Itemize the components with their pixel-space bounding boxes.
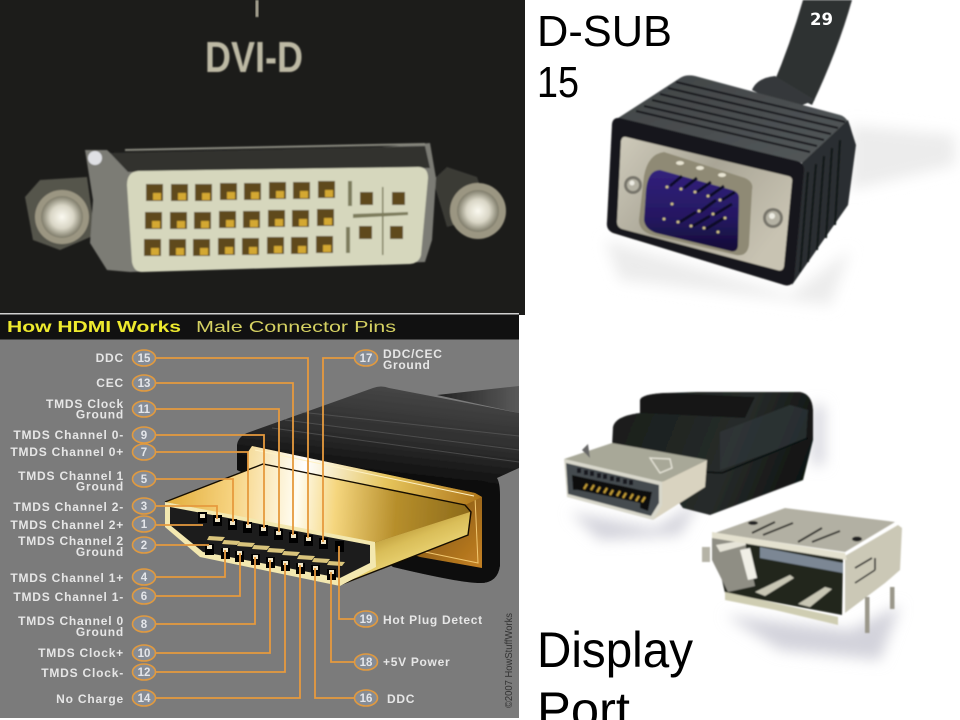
label: Display Port [537, 622, 693, 720]
gold side surface [340, 512, 470, 585]
icon: D-SUB 15 VGA connector photo [605, 0, 955, 305]
label: D-SUB 15: 15 [537, 58, 579, 107]
pin numbers: 10 [138, 648, 150, 660]
contact slot [572, 475, 652, 511]
cable [773, 0, 852, 105]
pin numbers: 6 [141, 591, 147, 603]
pin numbers: 2 [141, 540, 147, 552]
pin numbers: 13 [138, 378, 150, 390]
left pin labels: TMDS Channel 2- [13, 500, 124, 514]
panel: DVI-D connector photo [0, 0, 525, 315]
pin numbers: 8 [141, 619, 148, 631]
pin numbers: 14 [138, 693, 151, 705]
soft shadows [570, 405, 900, 660]
pin numbers: 18 [360, 657, 373, 669]
pin leader lines [156, 358, 354, 698]
cream top strip [248, 446, 482, 505]
label: Display Port: Display [537, 622, 693, 678]
left wall [712, 537, 755, 592]
header bar: Male Connector Pins [196, 319, 396, 336]
shell highlights [676, 161, 726, 177]
left pin labels: TMDS Channel 1+ [10, 571, 124, 585]
left pin labels: Ground [76, 625, 124, 639]
left pin labels: TMDS Clock [46, 397, 124, 411]
housing front [607, 118, 804, 285]
right pin labels: Ground [383, 358, 431, 372]
left pin labels: TMDS Channel 0- [13, 428, 124, 442]
gold pin highlights [151, 190, 333, 255]
pin numbers: 3 [141, 501, 147, 513]
housing ridges [272, 412, 519, 462]
orange rear rim [248, 446, 482, 568]
left pin labels: Ground [76, 480, 124, 494]
pin numbers [138, 353, 373, 705]
black plug face [170, 507, 370, 578]
pin numbers: 11 [138, 404, 151, 416]
metal side [653, 460, 707, 520]
blue insert [644, 170, 739, 251]
metal plate [617, 137, 792, 270]
latch [640, 393, 755, 418]
right pin labels: Hot Plug Detect [383, 613, 483, 627]
left pin labels: TMDS Channel 1- [13, 590, 124, 604]
bottom rail [725, 592, 838, 625]
pin numbers: 17 [360, 353, 372, 365]
pin numbers: 4 [141, 572, 148, 584]
left pin labels: TMDS Channel 2+ [10, 518, 124, 532]
right pin labels: DDC [387, 692, 415, 706]
housing side [792, 120, 856, 285]
pin numbers: 16 [360, 693, 372, 705]
label: D-SUB 15 [537, 7, 672, 107]
D shell [639, 152, 752, 255]
tongues [755, 575, 794, 596]
left pin labels: Ground [76, 408, 124, 422]
plug body [612, 392, 813, 515]
metal top [564, 443, 707, 482]
top plate holes [748, 521, 758, 525]
upper pin blocks [198, 512, 344, 552]
header bar [0, 313, 519, 340]
left pin labels: No Charge [56, 692, 124, 706]
pin number badges [132, 350, 378, 706]
pin numbers: 1 [141, 519, 148, 531]
side plate [845, 525, 902, 613]
shoulder highlight [720, 405, 808, 470]
flat blade slot and cross [346, 181, 408, 255]
right pin labels: DDC/CEC [383, 347, 443, 361]
left pin labels: TMDS Clock+ [38, 646, 124, 660]
screws [624, 176, 642, 194]
pin numbers: 12 [138, 667, 150, 679]
tick mark above label [256, 0, 258, 17]
top plate [715, 508, 895, 552]
gold top plate [165, 464, 470, 543]
DisplayPort socket [702, 508, 902, 633]
right pin labels [383, 347, 483, 706]
metal shell [85, 143, 436, 272]
left pin labels: TMDS Channel 0+ [10, 445, 124, 459]
label: DVI-D: DVI-D [205, 33, 303, 82]
top rail [712, 532, 847, 560]
left pin labels: CEC [96, 376, 124, 390]
cable [437, 386, 519, 413]
lower pin blocks [205, 544, 336, 580]
pin numbers: 9 [141, 430, 147, 442]
pin strip [760, 547, 843, 573]
pin numbers: 5 [141, 474, 148, 486]
left pin labels: TMDS Channel 2 [18, 534, 124, 548]
left screw [25, 177, 95, 250]
pin numbers: 19 [360, 614, 372, 626]
right pin labels: +5V Power [383, 655, 450, 669]
left pin labels: Ground [76, 545, 124, 559]
left pin labels [10, 351, 124, 706]
label: D-SUB 15: D-SUB [537, 7, 672, 56]
left pin labels: DDC [96, 351, 124, 365]
pin numbers: 15 [138, 353, 151, 365]
panel: HDMI male connector pin diagram [0, 313, 519, 718]
legs [865, 597, 870, 633]
icon: HDMI plug illustration [165, 386, 519, 586]
header bar: How HDMI Works [7, 319, 181, 336]
metal front [564, 459, 662, 520]
left pin labels: TMDS Channel 1 [18, 469, 124, 483]
ridges on top [636, 82, 845, 152]
socket pins [663, 186, 726, 233]
black housing [237, 386, 519, 583]
gold lower contacts [207, 536, 345, 566]
housing top [615, 75, 852, 163]
left tab [702, 547, 710, 562]
plug edge [165, 502, 376, 586]
white pin face [127, 167, 428, 272]
slide number: 29 [810, 10, 833, 29]
opening [712, 537, 843, 615]
icon: DVI socket [25, 143, 506, 272]
soft shadows [605, 125, 955, 305]
pin numbers: 7 [141, 447, 147, 459]
icon: DisplayPort plug and socket photo [564, 392, 902, 660]
DisplayPort plug [564, 392, 813, 520]
copyright note: ©2007 HowStuffWorks [503, 613, 515, 708]
pin grid [144, 181, 405, 256]
gold pins [584, 484, 645, 502]
pin shadows [670, 176, 735, 229]
left pin labels: TMDS Channel 0 [18, 614, 124, 628]
pin tips [200, 514, 334, 574]
left pin labels: TMDS Clock- [41, 666, 124, 680]
right screw [433, 167, 506, 239]
pin windows top row [577, 468, 633, 485]
